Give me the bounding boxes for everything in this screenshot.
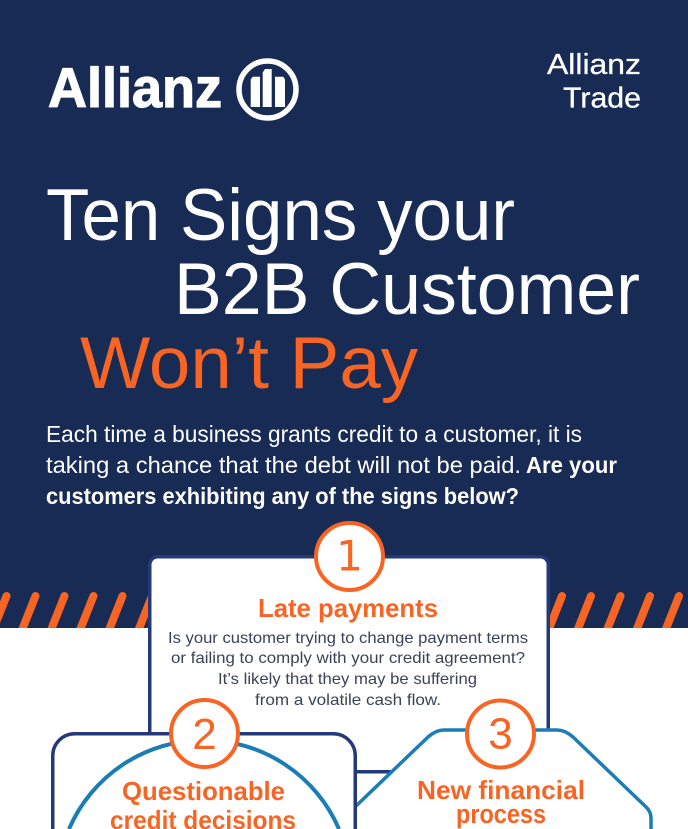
Allianz Trade label: Allianz: [547, 49, 641, 81]
card 1 body text: [168, 630, 528, 709]
intro paragraph: Each time a business grants credit to a customer, it is: [46, 421, 582, 447]
orange stripe band: [0, 596, 679, 635]
card 1 body text: It’s likely that they may be suffering: [218, 671, 477, 688]
title: [46, 175, 640, 404]
card 1 number badge: [316, 523, 383, 590]
intro paragraph: [46, 421, 617, 509]
card 1 body text: Is your customer trying to change payment terms: [168, 630, 528, 647]
header panel background: [0, 0, 688, 628]
card 1 body text: from a volatile cash flow.: [255, 692, 441, 709]
card 2: questionable credit decisions: [53, 700, 355, 829]
card 2 number badge: 2: [192, 710, 217, 759]
title: B2B Customer: [174, 249, 640, 330]
card 1 body text: or failing to comply with your credit agreement?: [171, 650, 525, 667]
logo emblem: [239, 61, 296, 118]
title: Won’t Pay: [80, 323, 419, 404]
card 3 number badge: [467, 700, 534, 768]
card 1 number badge: 1: [336, 532, 363, 580]
card 3 heading: process: [456, 799, 546, 829]
card 2 blue circle: [69, 740, 339, 829]
card 3: new financial process: [350, 700, 651, 829]
card 3 heading: New financial: [417, 775, 585, 805]
Allianz Trade label: Trade: [563, 82, 641, 114]
card 1 outline: [150, 557, 548, 772]
card 1 heading: Late payments: [258, 593, 438, 623]
intro paragraph: customers exhibiting any of the signs below?: [46, 483, 519, 509]
card 3 hexagon outline: [350, 730, 651, 829]
card 3 number badge: 3: [488, 710, 513, 758]
card 2 number badge: [171, 700, 238, 767]
card 3 heading: [417, 775, 585, 829]
intro paragraph: taking a chance that the debt will not be paid.: [46, 452, 521, 478]
card 2 heading: [110, 776, 296, 829]
intro paragraph: Are your: [526, 452, 617, 478]
card 1: late payments: [150, 523, 548, 772]
Allianz Trade label: [547, 49, 641, 114]
logo wordmark: Allianz: [48, 56, 222, 119]
card 2 heading: Questionable: [122, 776, 285, 806]
card 2 outline: [53, 734, 355, 829]
title: Ten Signs your: [46, 175, 515, 256]
Allianz logo: [48, 56, 296, 119]
